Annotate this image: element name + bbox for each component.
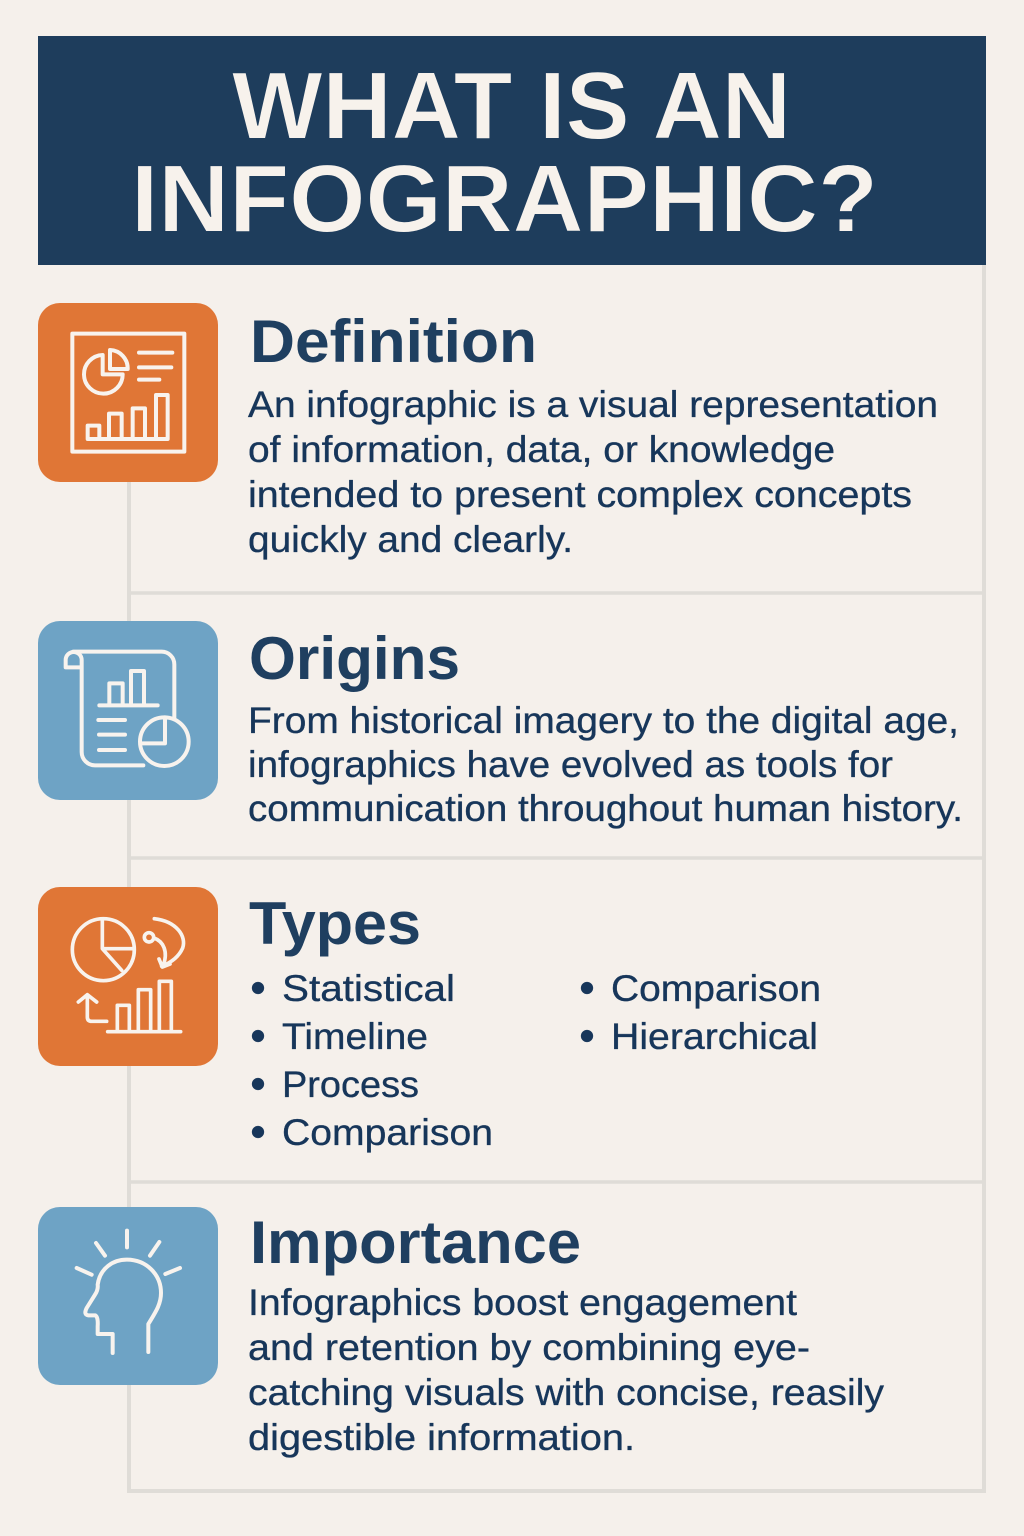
list: types column two — [581, 968, 821, 1057]
importance text: Infographics boost engagement — [248, 1282, 798, 1323]
icon: scroll with charts — [38, 621, 218, 800]
definition text: quickly and clearly. — [248, 519, 573, 560]
definition text — [248, 384, 938, 560]
importance text — [248, 1282, 885, 1458]
panel: origins — [38, 621, 963, 829]
icon: head with light rays — [38, 1207, 218, 1385]
definition text: An infographic is a visual representation — [248, 384, 938, 425]
list: types column one: Timeline — [282, 1016, 428, 1057]
icon: report with pie and bar chart — [38, 303, 218, 482]
origins text: From historical imagery to the digital age, — [248, 700, 959, 741]
panel: importance — [38, 1207, 885, 1458]
list: types column one: Process — [282, 1064, 419, 1105]
heading: types: Types — [249, 890, 421, 957]
title banner: INFOGRAPHIC? — [131, 146, 878, 252]
list: types column two: Hierarchical — [611, 1016, 818, 1057]
importance text: and retention by combining eye- — [248, 1327, 810, 1368]
panel: types — [38, 887, 821, 1153]
definition text: of information, data, or knowledge — [248, 429, 835, 470]
title banner — [38, 36, 986, 265]
heading: definition: Definition — [250, 308, 537, 375]
origins text — [248, 700, 963, 829]
icon: pie chart, arrows and bars — [38, 887, 218, 1066]
heading: origins: Origins — [249, 625, 460, 692]
list: types column one: Comparison — [282, 1112, 493, 1153]
title banner: WHAT IS AN — [232, 52, 791, 160]
origins text: communication throughout human history. — [248, 788, 963, 829]
list: types column one: Statistical — [282, 968, 455, 1009]
list: types column one — [252, 968, 493, 1153]
importance text: catching visuals with concise, reasily — [248, 1372, 885, 1413]
origins text: infographics have evolved as tools for — [248, 744, 893, 785]
definition text: intended to present complex concepts — [248, 474, 912, 515]
heading: importance: Importance — [250, 1209, 581, 1276]
list: types column two: Comparison — [611, 968, 821, 1009]
panel: definition — [38, 303, 938, 560]
importance text: digestible information. — [248, 1417, 635, 1458]
